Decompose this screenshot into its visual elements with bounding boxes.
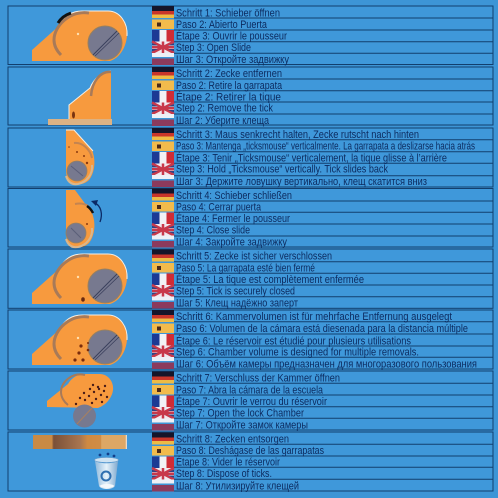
step 3 text: Step 3: Hold „Ticksmouse“ vertically. Tick slides back (176, 164, 388, 176)
step 3 text: Étape 3: Tenir „Ticksmouse“ verticalement, la tique glisse à l’arrière (176, 151, 447, 164)
step 7 text: Paso 7: Abra la cámara de la escuela (176, 384, 324, 396)
step 8 text: Étape 8: Vider le réservoir (176, 455, 280, 468)
icon: device held vertically (66, 130, 94, 184)
icon: device with several ticks (32, 315, 127, 365)
panel: step 3 (8, 128, 493, 188)
icon: tick removal device (48, 71, 112, 125)
icon: open slider device (32, 11, 127, 61)
arrow: close direction (91, 200, 101, 222)
panel: step 4 (8, 188, 493, 248)
step 5 text (176, 250, 364, 309)
step 4 text (176, 190, 292, 248)
step 4 text: Schritt 4: Schieber schließen (176, 190, 292, 202)
icon: recycle bin (94, 458, 118, 489)
step 7 text: Шаг 7: Откройте замок камеры (176, 419, 308, 431)
step 1 text: Шаг 3: Откройте задвижку (176, 54, 289, 66)
step 8 text: Шаг 8: Утилизируйте клещей (176, 480, 299, 492)
step 6 text: Step 6: Chamber volume is designed for multiple removals. (176, 346, 419, 358)
icon: emptied chamber bar (33, 435, 127, 449)
step 5 text: Paso 5: La garrapata esté bien fermé (176, 262, 315, 274)
step 2 text: Step 2: Remove the tick (176, 102, 273, 114)
step 2 text: Шаг 2: Уберите клеща (176, 115, 270, 127)
flags column (152, 67, 174, 126)
step 5 text: Schritt 5: Zecke ist sicher verschlossen (176, 250, 332, 262)
step 2 text: Schritt 2: Zecke entfernen (176, 68, 282, 80)
step 7 text: Step 7: Open the lock Chamber (176, 407, 304, 419)
step 2 text (176, 68, 283, 127)
panel: step 2 (8, 67, 493, 127)
flags column (152, 188, 174, 248)
flags column (152, 250, 174, 308)
step 5 text: Step 5: Tick is securely closed (176, 285, 295, 297)
step 8 text (176, 433, 324, 492)
step 1 text: Paso 2: Abierto Puerta (176, 19, 268, 31)
step 3 text: Schritt 3: Maus senkrecht halten, Zecke rutscht nach hinten (176, 129, 419, 141)
step 1 text (176, 8, 289, 66)
step 6 text (176, 311, 477, 370)
step 1 text: Schritt 1: Schieber öffnen (176, 8, 280, 20)
flags column (152, 372, 174, 430)
step 3 text (176, 129, 475, 188)
step 5 text: Шаг 5: Клещ надёжно заперт (176, 297, 298, 309)
panel: step 7 (8, 371, 493, 431)
step 3 text: Шаг 3: Держите ловушку вертикально, клещ скатится вниз (176, 176, 427, 188)
flags column (152, 128, 174, 187)
step 7 text: Schritt 7: Verschluss der Kammer öffnen (176, 372, 340, 384)
panel: step 5 (8, 249, 493, 309)
step 6 text: Schritt 6: Kammervolumen ist für mehrfache Entfernung ausgelegt (176, 311, 452, 323)
step 8 text: Schritt 8: Zecken entsorgen (176, 433, 289, 445)
step 4 text: Paso 4: Cerrar puerta (176, 201, 262, 213)
panel: step 6 (8, 310, 493, 370)
step 1 text: Étape 3: Ouvrir le pousseur (176, 30, 287, 42)
step 1 text: Step 3: Open Slide (176, 42, 251, 54)
step 7 text: Étape 7: Ouvrir le verrou du réservoir (176, 395, 327, 408)
flags column (152, 432, 174, 492)
step 6 text: Étape 6: Le réservoir est étudié pour plusieurs utilisations (176, 334, 411, 347)
step 2 text: Étape 2: Retirer la tique (176, 90, 281, 104)
step 7 text (176, 372, 340, 431)
panel: step 1 (8, 6, 493, 66)
step 5 text: Étape 5: La tique est complètement enfermée (176, 273, 364, 286)
panel: step 8 (8, 432, 493, 492)
icon: closing slider device (66, 190, 101, 247)
icon: closed device with tick (32, 254, 127, 304)
flags column (152, 310, 174, 369)
step 4 text: Étape 4: Fermer le pousseur (176, 212, 290, 225)
step 2 text: Paso 2: Retire la garrapata (176, 80, 283, 92)
icon: falling ticks (99, 453, 115, 457)
step 8 text: Paso 8: Deshágase de las garrapatas (176, 445, 324, 457)
step 4 text: Шаг 4: Закройте задвижку (176, 236, 287, 248)
step 4 text: Step 4: Close slide (176, 224, 250, 236)
step 8 text: Step 8: Dispose of ticks. (176, 468, 272, 480)
flags column (152, 6, 174, 65)
icon: opened chamber device (47, 374, 113, 428)
